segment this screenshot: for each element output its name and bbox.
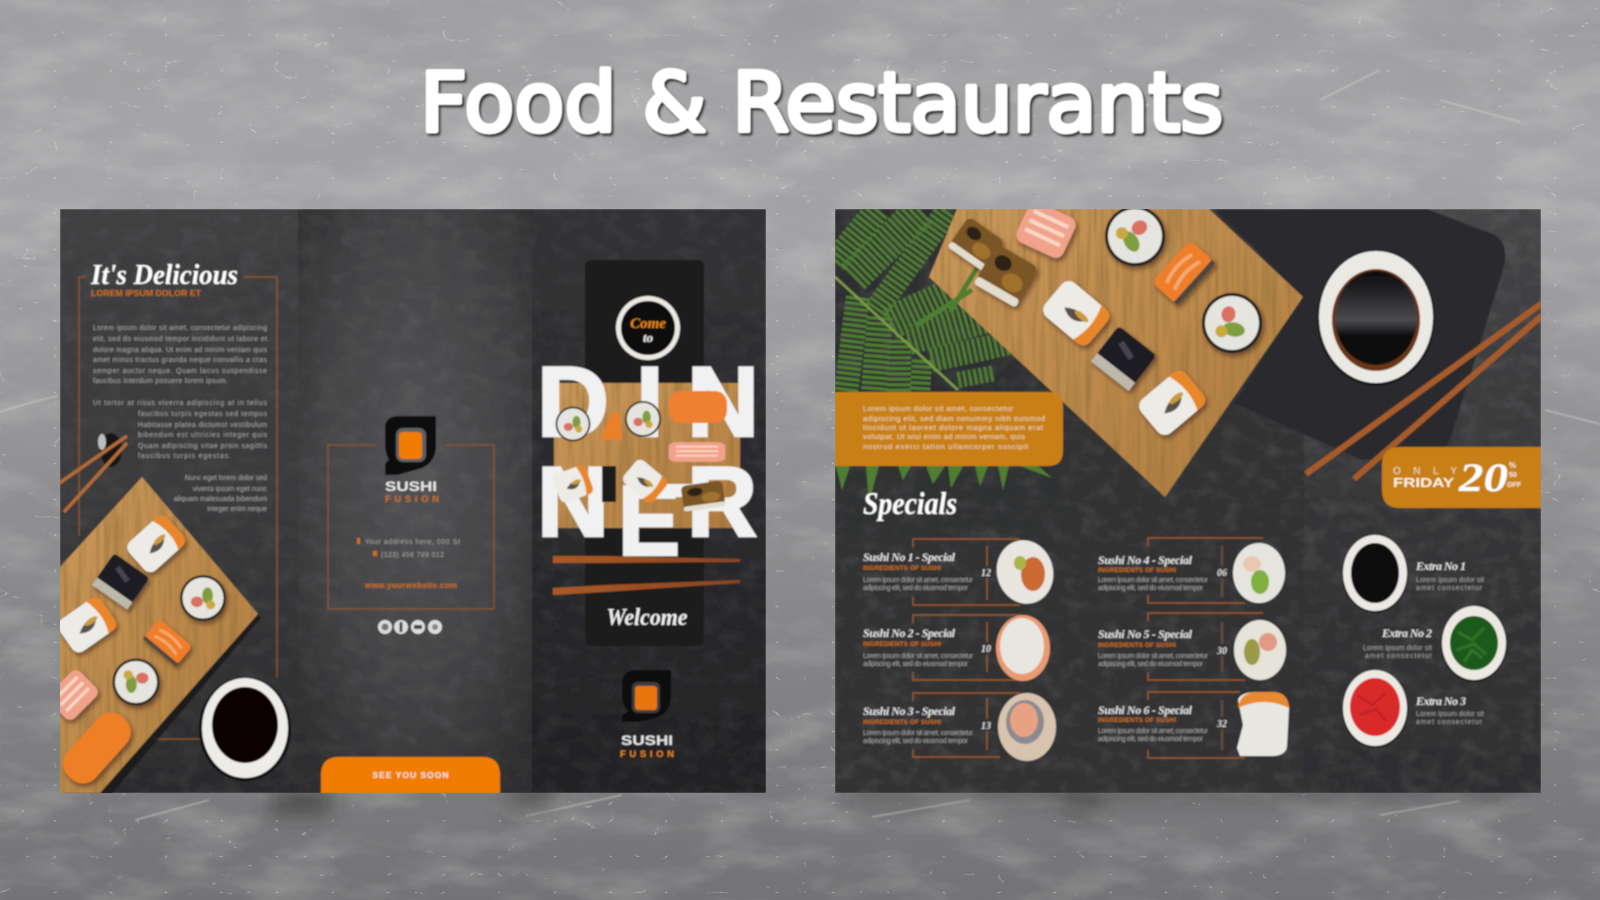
extra 1: soy dish: Extra No 1 [1415,559,1466,573]
body text: paragraph two: faucibus turpis egestas sed tempus [138,411,268,418]
dinner lettering: R [687,446,757,557]
menu item: sushi no 3: adipiscing elit, sed do eiusmod tempor [863,738,969,745]
extra 2: seaweed dish: Extra No 2 [1381,626,1432,640]
chopsticks: cover [553,556,740,595]
promo badge: only friday 20% off [1382,447,1541,508]
promo badge: only friday 20% off: FRIDAY [1393,475,1454,490]
shadows under brochures [270,790,1520,814]
menu item: sushi no 4: Lorem ipsum dolor sit amet, consectetur [1098,577,1209,584]
body text: paragraph two: Ut tortor at risus viverra adipiscing at in tellus [93,400,268,407]
wooden board with sushi [45,477,261,797]
menu item: sushi no 5: 30 [1216,646,1227,657]
panel: centre fold [1066,209,1304,793]
panel: cover fold [532,209,766,793]
panel: contact fold [298,209,532,793]
heading: specials: Specials [863,485,957,521]
chopsticks and small dish [58,433,127,512]
body text: paragraph two: Habitasse platea dictumst vestibulum [138,422,267,429]
dinner lettering: N [537,446,609,557]
extra 3: pickled ginger dish: Extra No 3 [1415,694,1466,708]
button: see you soon: SEE YOU SOON [372,770,450,780]
menu item: sushi no 6: Lorem ipsum dolor sit amet, consectetur [1098,728,1209,735]
menu item: sushi no 5: adipiscing elit, sed do eiusmod tempor [1098,661,1204,668]
body text: paragraph one: amet minus tractus gravida neque convallis a cras [93,357,268,364]
menu item: sushi no 3 [863,693,1056,761]
board sushi [948,195,1267,439]
body text: paragraph one [93,325,268,385]
menu item: sushi no 6: INGREDIENTS OF SUSHI [1098,717,1176,724]
menu item: sushi no 6 [1098,692,1289,758]
promo badge: only friday 20% off: % [1509,461,1516,470]
menu item: sushi no 1 [863,534,1060,610]
menu item: sushi no 3: Lorem ipsum dolor sit amet, consectetur [863,730,974,737]
menu item: sushi no 4: INGREDIENTS OF SUSHI [1098,567,1176,574]
menu item: sushi no 6: Sushi No 6 - Special [1098,703,1193,717]
extra 1: soy dish [1342,535,1484,613]
orange text banner: nostrud exerci tation ullamcorper suscipit [863,442,1029,451]
contact details: Your address here, 000 St [365,539,460,546]
button: see you soon [321,757,500,793]
logo: cover: FUSION [620,749,674,760]
orange text banner [835,392,1063,466]
menu item: sushi no 2: adipiscing elit, sed do eiusmod tempor [863,661,969,668]
orange text banner: tincidunt ut laoreet dolore magna aliquam erat [863,423,1044,432]
body text: paragraph one: Lorem ipsum dolor sit amet, consectetur adipiscing [93,325,267,332]
fern over board [915,255,985,326]
body text: paragraph two: bibendum est ultricies integer quis [138,432,268,439]
promo badge: only friday 20% off: 20 [1458,455,1508,500]
logo: cover [620,670,674,760]
wooden board [929,209,1303,497]
panel: text fold [60,209,298,793]
menu item: sushi no 5: INGREDIENTS OF SUSHI [1098,642,1176,649]
bowl: come to: Come [630,316,666,332]
menu item: sushi no 1: adipiscing elit, sed do eiusmod tempor [863,585,969,592]
dinner lettering: E [618,465,680,576]
dinner board [554,383,740,528]
soy sauce bowl [1317,250,1435,386]
slate tray [585,260,704,646]
panel: extras fold [1304,209,1541,793]
menu item: sushi no 3: Sushi No 3 - Special [863,704,956,718]
orange text banner: Lorem ipsum dolor sit amet, consectetur [863,404,1014,413]
panel: specials fold [835,209,1066,793]
logo: sushi fusion: SUSHI [385,478,437,494]
menu item: sushi no 6: adipiscing elit, sed do eiusmod tempor [1098,736,1204,743]
subheading: LOREM IPSUM DOLOR ET [91,288,202,298]
menu item: sushi no 4: adipiscing elit, sed do eiusmod tempor [1098,585,1204,592]
menu item: sushi no 5 [1098,613,1286,680]
extra 2: seaweed dish [1363,606,1507,682]
body text: paragraph three: aliquam malesuada bibendum [174,496,267,503]
fern [835,209,1009,392]
body text: paragraph three: viverra ipsum eget nunc [193,486,267,493]
extra 2: seaweed dish: Lorem ipsum dolor sit [1363,645,1432,652]
menu item: sushi no 1: Lorem ipsum dolor sit amet, consectetur [863,577,974,584]
menu item: sushi no 4: Sushi No 4 - Special [1098,553,1193,567]
promo badge: only friday 20% off: OFF [1507,482,1522,489]
text: welcome: Welcome [606,605,688,631]
menu item: sushi no 6: 32 [1216,719,1227,730]
contact frame [328,445,494,609]
logo: sushi fusion [385,416,439,505]
menu item: sushi no 2: Lorem ipsum dolor sit amet, consectetur [863,653,974,660]
menu item: sushi no 4 [1098,538,1285,603]
sushi on dinner board [552,391,727,512]
dinner lettering: N [687,346,759,457]
body text: paragraph three: Nunc eget lorem dolor sed [185,475,267,482]
menu item: sushi no 5: Lorem ipsum dolor sit amet, consectetur [1098,653,1209,660]
text frame [79,277,277,739]
contact details: www.yourwebsite.com [364,581,457,590]
panel: right brochure [835,195,1545,793]
orange text banner: volutpat. Ut wisi enim ad minim veniam, quis [863,432,1025,441]
bowl: come to: to [643,330,654,345]
fern tips below banner [836,466,1052,502]
panel: left brochure [45,209,766,797]
dinner lettering: D [537,346,609,457]
menu item: sushi no 1: INGREDIENTS OF SUSHI [863,565,941,572]
body text: paragraph two [93,400,268,460]
body text: paragraph three [174,475,267,513]
logo: cover: SUSHI [621,732,673,748]
extra 3: pickled ginger dish: amet consectetur [1416,719,1483,726]
promo badge: only friday 20% off: 50 [1509,472,1517,479]
bowl: come to [616,296,680,360]
slate [1215,209,1505,460]
body text: paragraph one: semper auctor neque. Quam lacus suspendisse [93,368,267,375]
menu item: sushi no 2: 10 [981,644,991,655]
menu item: sushi no 2 [863,615,1050,681]
menu item: sushi no 2: Sushi No 2 - Special [863,626,956,640]
extra 3: pickled ginger dish [1342,670,1484,748]
menu item: sushi no 1: Sushi No 1 - Special [863,550,956,564]
menu item: sushi no 5: Sushi No 5 - Special [1098,627,1193,641]
dinner lettering: I [636,346,664,457]
menu item: sushi no 2: INGREDIENTS OF SUSHI [863,641,941,648]
extra 1: soy dish: Lorem ipsum dolor sit [1416,577,1484,584]
extra 3: pickled ginger dish: Lorem ipsum dolor sit [1416,711,1484,718]
body text: paragraph three: integer enim neque [207,506,267,513]
body text: paragraph two: faucibus turpis egestas. [138,453,231,460]
contact details: (123) 456 789 012 [381,552,444,559]
dinner lettering [541,364,758,558]
menu item: sushi no 4: 06 [1217,568,1227,579]
logo: sushi fusion: FUSION [385,494,439,505]
soy sauce bowl [199,677,291,781]
body text: paragraph one: elit, sed do eiusmod tempor incididunt ut labore et [93,336,267,343]
body text: paragraph one: dolore magna aliqua. Ut enim ad minim veniam quis [93,347,268,354]
heading: It's Delicious: It's Delicious [90,259,238,291]
contact details [357,538,460,590]
body text: paragraph one: faucibus interdum posuere lorem ipsum. [93,378,228,385]
title: Food & Restaurants [420,56,1223,151]
body text: paragraph two: Quam adipiscing vitae proin sagittis [138,443,268,450]
menu item: sushi no 3: INGREDIENTS OF SUSHI [863,719,941,726]
extra 1: soy dish: amet consectetur [1416,585,1483,592]
extra 2: seaweed dish: amet consectetur [1365,653,1433,660]
social icons [378,620,442,634]
promo badge: only friday 20% off: ONLY [1393,466,1457,477]
menu item: sushi no 1: 12 [981,568,991,579]
chopsticks [1306,301,1545,479]
orange text banner: adipiscing elit, sed diam nonummy nibh euismod [863,414,1045,423]
menu item: sushi no 3: 13 [981,721,991,732]
